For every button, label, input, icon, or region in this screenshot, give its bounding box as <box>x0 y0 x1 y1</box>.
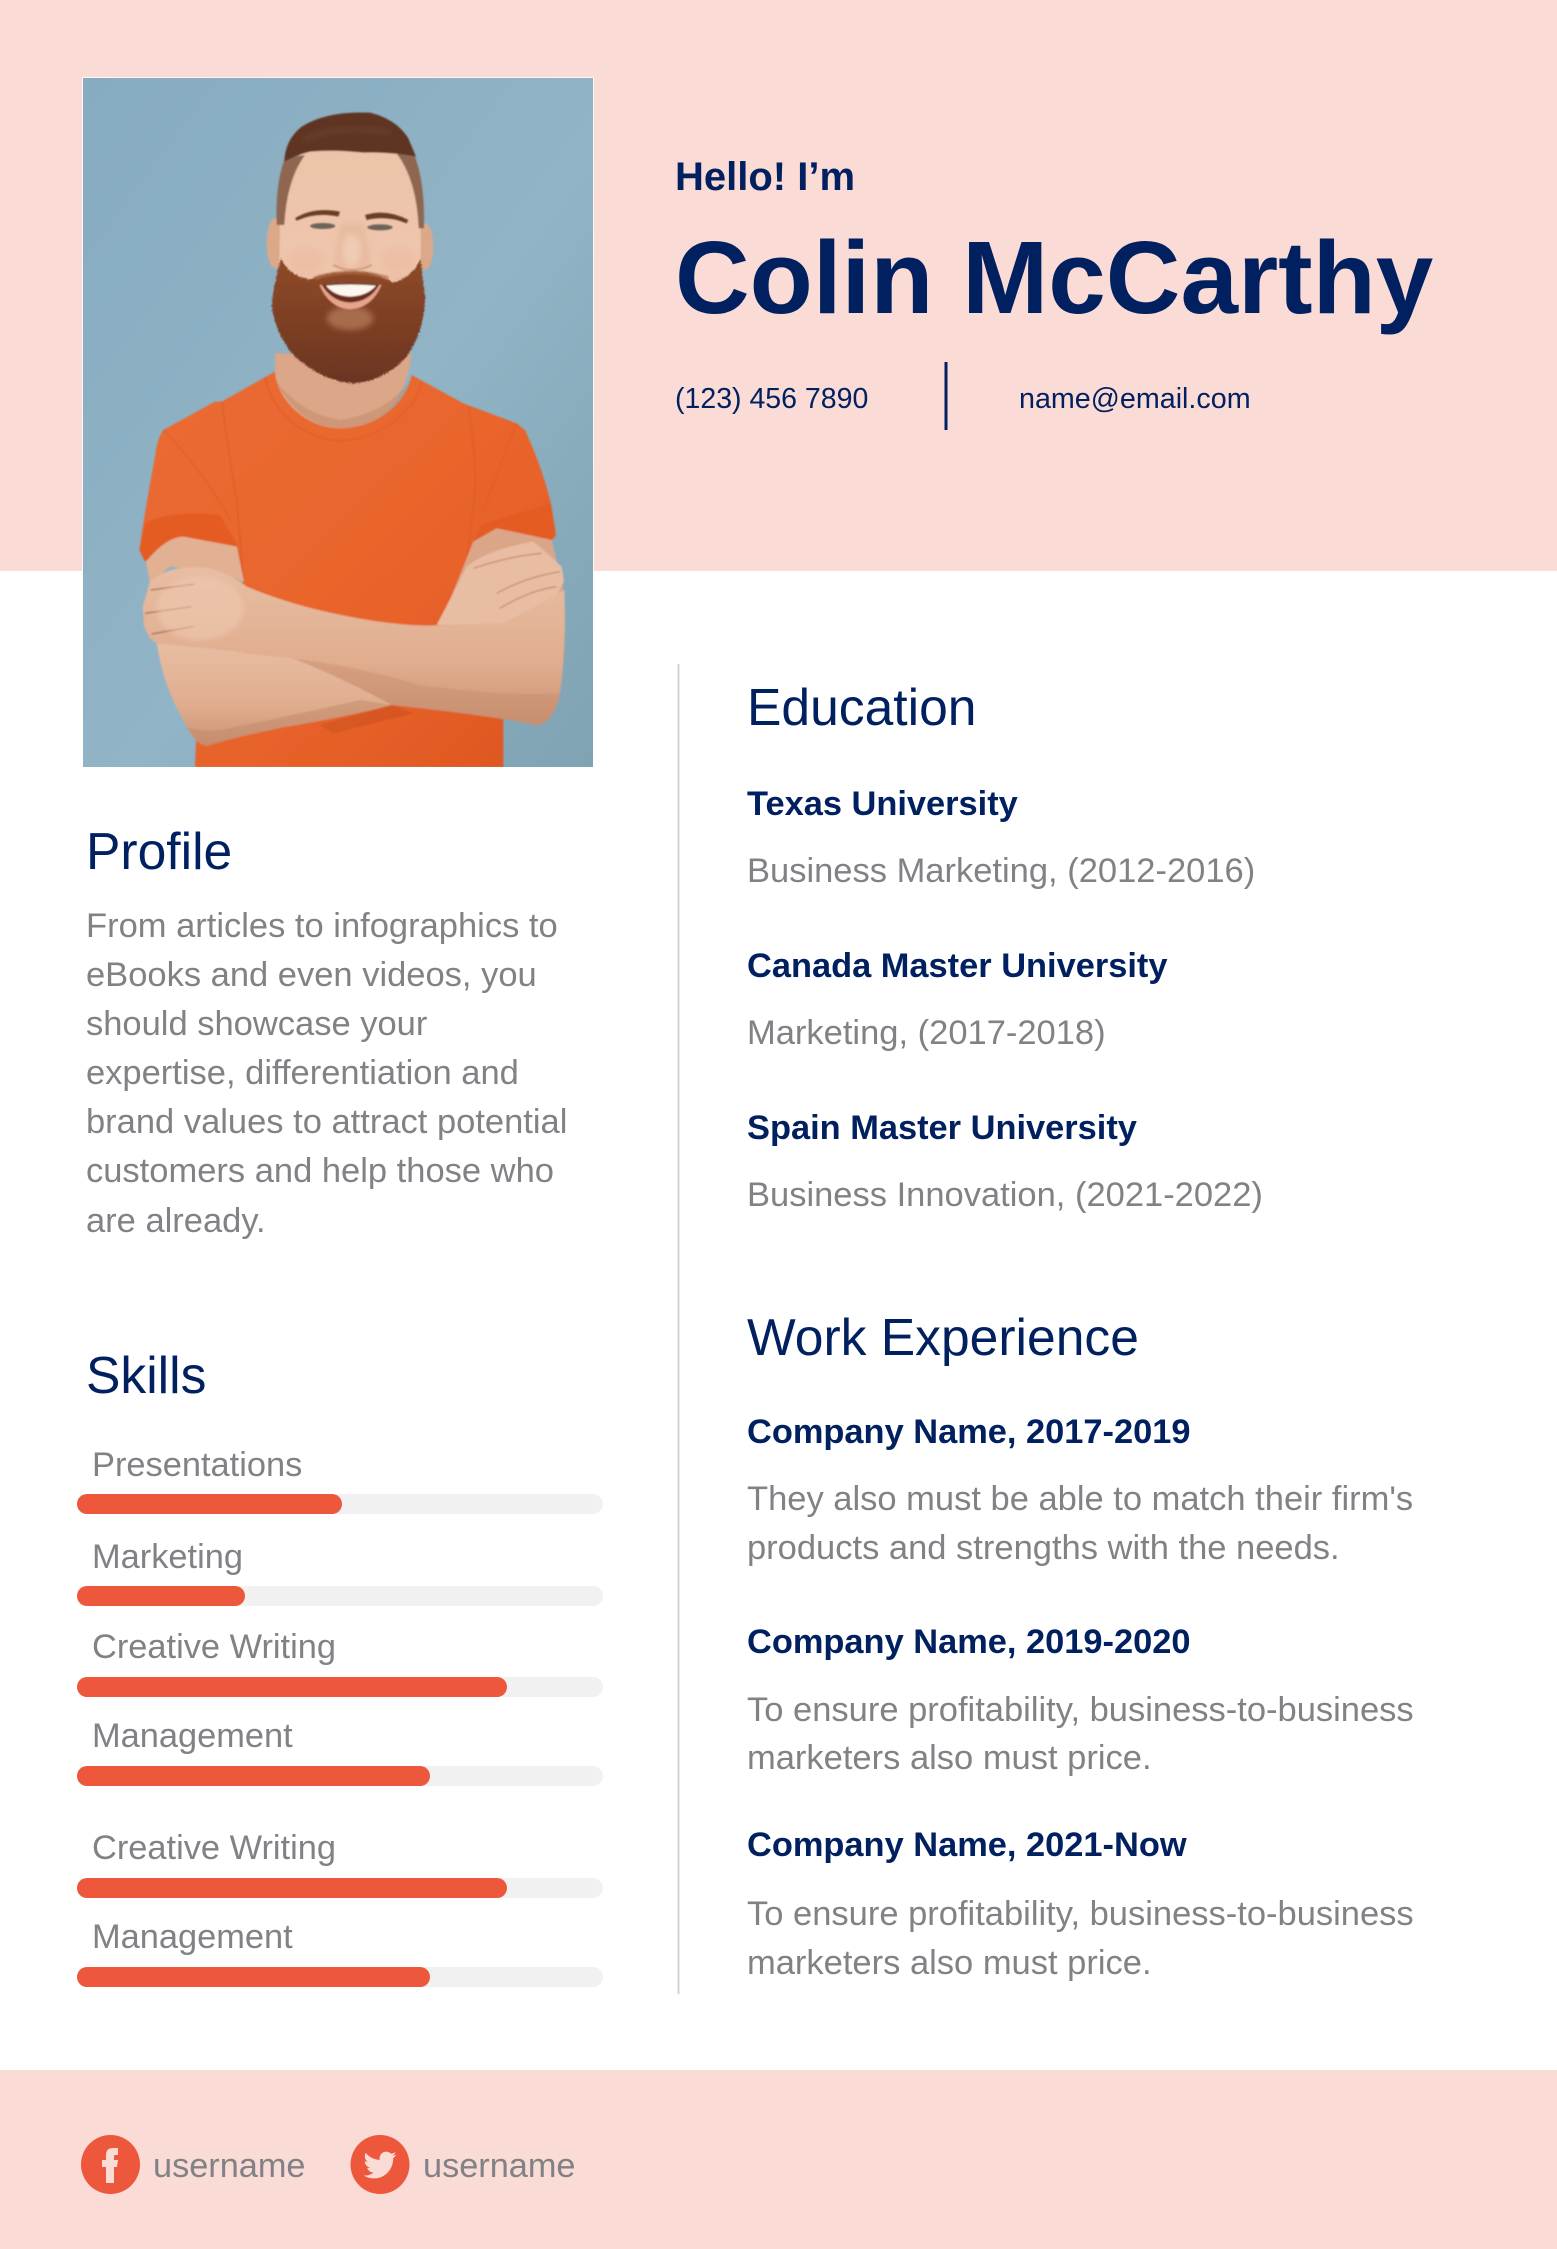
work entry 2021-Now: marketers also must price. <box>747 1944 1152 1982</box>
work entry 2019-2020: To ensure profitability, business-to-business <box>747 1691 1414 1729</box>
education entry: Canada Master University: Marketing, (2017-2018) <box>747 1014 1106 1052</box>
skill: Marketing: Marketing <box>92 1538 243 1576</box>
skill: Marketing <box>77 1538 603 1606</box>
heading: Profile: Profile <box>86 822 232 880</box>
name title: Colin McCarthy <box>675 219 1433 335</box>
education entry: Canada Master University <box>747 947 1168 1052</box>
header band <box>0 0 1557 571</box>
work entry 2019-2020 <box>747 1623 1414 1777</box>
education entry: Spain Master University: Spain Master University <box>747 1109 1137 1147</box>
work entry 2021-Now: To ensure profitability, business-to-business <box>747 1895 1414 1933</box>
skill: Creative Writing (second) <box>77 1829 603 1898</box>
education entry: Spain Master University <box>747 1109 1263 1214</box>
greeting: Hello! I’m <box>675 155 855 199</box>
profile text <box>86 907 567 1240</box>
profile text: should showcase your <box>86 1005 427 1043</box>
profile text: expertise, differentiation and <box>86 1054 519 1092</box>
work entry 2021-Now: Company Name, 2021-Now <box>747 1826 1187 1864</box>
skill: Presentations: Presentations <box>92 1446 302 1484</box>
email address: name@email.com <box>1019 383 1251 415</box>
phone number: (123) 456 7890 <box>675 383 868 415</box>
education entry: Canada Master University: Canada Master University <box>747 947 1168 985</box>
skill: Management (second) <box>77 1918 603 1987</box>
skill: Management <box>77 1717 603 1786</box>
heading: Education: Education <box>747 678 976 736</box>
heading: Work Experience: Work Experience <box>747 1308 1139 1366</box>
icon: facebook <box>81 2135 140 2194</box>
work entry 2019-2020: marketers also must price. <box>747 1739 1152 1777</box>
education entry: Texas University <box>747 785 1255 890</box>
education entry: Texas University: Business Marketing, (2012-2016) <box>747 852 1255 890</box>
skill: Presentations <box>77 1446 603 1514</box>
footer band <box>0 2070 1557 2249</box>
work entry 2017-2019: Company Name, 2017-2019 <box>747 1413 1190 1451</box>
profile text: brand values to attract potential <box>86 1103 567 1141</box>
work entry 2019-2020: Company Name, 2019-2020 <box>747 1623 1190 1661</box>
skill: Creative Writing <box>77 1628 603 1697</box>
work entry 2017-2019: They also must be able to match their firm's <box>747 1480 1413 1518</box>
work entry 2017-2019: products and strengths with the needs. <box>747 1529 1340 1567</box>
icon: twitter <box>350 2135 410 2194</box>
work entry 2021-Now <box>747 1826 1414 1982</box>
photo: portrait of smiling bearded man <box>82 77 594 768</box>
skill: Management: Management <box>92 1717 293 1755</box>
skill: Management (second): Management <box>92 1918 293 1956</box>
work entry 2017-2019 <box>747 1413 1413 1567</box>
profile text: customers and help those who <box>86 1152 554 1190</box>
twitter username: username <box>423 2147 576 2185</box>
profile text: eBooks and even videos, you <box>86 956 537 994</box>
skills bar chart <box>77 1446 603 1987</box>
facebook username: username <box>153 2147 306 2185</box>
contact divider <box>944 362 948 430</box>
heading: Skills: Skills <box>86 1346 206 1404</box>
education entry: Texas University: Texas University <box>747 785 1018 823</box>
skill: Creative Writing (second): Creative Writing <box>92 1829 336 1867</box>
education entry: Spain Master University: Business Innovation, (2021-2022) <box>747 1176 1263 1214</box>
skill: Creative Writing: Creative Writing <box>92 1628 336 1666</box>
profile text: From articles to infographics to <box>86 907 558 945</box>
profile text: are already. <box>86 1202 266 1240</box>
